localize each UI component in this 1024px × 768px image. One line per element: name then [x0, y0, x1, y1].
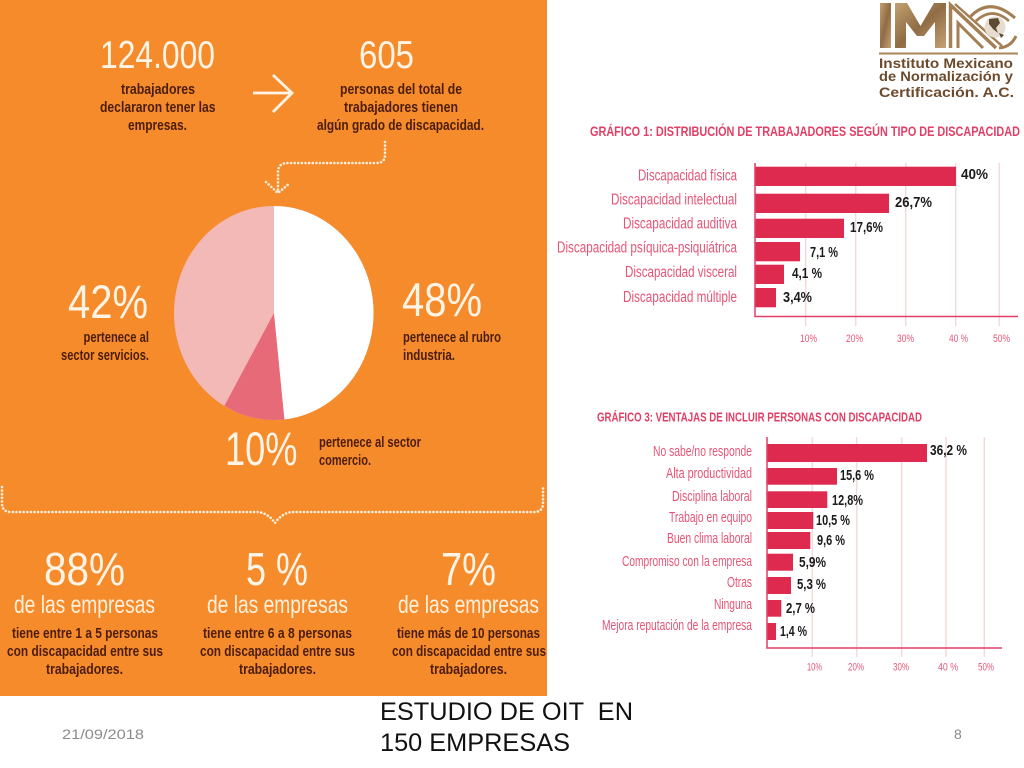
value labels: 7,1 % [810, 244, 838, 261]
category labels: Trabajo en equipo [669, 510, 752, 526]
axis ticks: 20% [846, 333, 863, 345]
stat: 48% industry: 48% [402, 273, 482, 326]
stat: 42% services [61, 275, 149, 364]
stat: 7% of companies: 7% [441, 543, 496, 595]
arrow: right [253, 75, 292, 112]
stat: 605 people: 605 [359, 34, 414, 77]
logo: IMNC: de Normalización y [879, 69, 1014, 84]
stat: 88% of companies [7, 543, 163, 678]
value labels: 4,1 % [792, 265, 822, 282]
stat: 10% commerce: pertenece al sector [319, 435, 421, 451]
category labels: No sabe/no responde [653, 444, 752, 460]
footer: date: 21/09/2018 [62, 726, 144, 742]
value labels: 3,4% [783, 289, 812, 306]
stat: 124.000 workers [100, 34, 216, 134]
bars [767, 444, 927, 640]
bracket: dotted divider [2, 487, 543, 523]
stat: 7% of companies: trabajadores. [430, 662, 507, 678]
stat: 10% commerce [225, 422, 421, 475]
stat: 42% services: sector servicios. [61, 348, 149, 364]
chart: gráfico 3 [597, 410, 1002, 674]
value labels: 5,9% [799, 554, 826, 571]
category labels: Discapacidad múltiple [623, 289, 737, 306]
category labels [557, 168, 737, 306]
stat: 5% of companies: trabajadores. [239, 662, 316, 678]
stat: 7% of companies [392, 543, 546, 678]
footer: study caption [380, 698, 633, 757]
stat: 605 people: trabajadores tienen [344, 100, 458, 116]
stat: 605 people: algún grado de discapacidad. [317, 118, 484, 134]
axis ticks [800, 333, 1010, 345]
stat: 124.000 workers: 124.000 [100, 34, 215, 77]
logo: IMNC [879, 3, 1018, 100]
axis ticks: 50% [993, 333, 1010, 345]
axis ticks: 50% [978, 662, 994, 674]
category labels: Disciplina laboral [672, 489, 752, 505]
value labels: 15,6 % [840, 467, 874, 484]
stat: 88% of companies: 88% [44, 543, 125, 595]
value labels: 2,7 % [786, 600, 815, 617]
stat: 5% of companies: tiene entre 6 a 8 personas [203, 626, 352, 642]
value labels [783, 166, 988, 306]
category labels: Alta productividad [666, 466, 752, 482]
stat: 124.000 workers: declararon tener las [100, 100, 216, 116]
stat: 88% of companies: de las empresas [14, 591, 155, 619]
pie chart: sectors [174, 206, 374, 420]
category labels: Discapacidad intelectual [611, 192, 737, 208]
bars [755, 167, 956, 307]
chart: gráfico 1 [557, 122, 1020, 345]
stat: 605 people [317, 34, 484, 134]
value labels: 5,3 % [797, 576, 826, 593]
value labels [780, 442, 967, 640]
category labels: Mejora reputación de la empresa [602, 618, 753, 634]
stat: 10% commerce: 10% [225, 422, 298, 475]
category labels: Discapacidad física [638, 168, 737, 184]
category labels: Otras [727, 575, 752, 591]
chart title: GRÁFICO 3: VENTAJAS DE INCLUIR PERSONAS CON DISCAPACIDAD [597, 410, 922, 424]
stat: 88% of companies: trabajadores. [46, 662, 123, 678]
axis ticks [807, 662, 994, 674]
value labels: 26,7% [895, 194, 932, 211]
stat: 5% of companies: con discapacidad entre sus [200, 644, 355, 660]
arrow: dotted connector to pie [266, 142, 385, 193]
category labels: Discapacidad visceral [625, 264, 737, 281]
value labels: 10,5 % [816, 512, 850, 529]
value labels: 12,8% [832, 492, 863, 509]
stat: 7% of companies: de las empresas [398, 591, 539, 619]
logo: IMNC: Certificación. A.C. [879, 85, 1014, 100]
stat: 5% of companies: de las empresas [207, 591, 348, 619]
footer: study caption: ESTUDIO DE OIT EN [380, 698, 633, 726]
axis ticks: 30% [893, 662, 909, 674]
value labels: 36,2 % [930, 442, 967, 459]
stat: 48% industry: pertenece al rubro [403, 330, 501, 346]
axis ticks: 40 % [938, 662, 958, 674]
stat: 48% industry [402, 273, 501, 364]
value labels: 40% [961, 166, 988, 183]
category labels: Buen clima laboral [667, 531, 752, 547]
axis ticks: 10% [800, 333, 817, 345]
stat: 605 people: personas del total de [340, 82, 462, 98]
logo: IMNC: Instituto Mexicano [879, 56, 1013, 71]
axis ticks: 30% [897, 333, 914, 345]
stat: 42% services: 42% [68, 275, 148, 328]
category labels: Discapacidad auditiva [623, 216, 737, 232]
stat: 5% of companies: 5 % [246, 543, 308, 595]
footer: page number: 8 [954, 726, 962, 742]
category labels: Compromiso con la empresa [622, 554, 753, 570]
stat: 88% of companies: tiene entre 1 a 5 personas [12, 626, 158, 642]
value labels: 9,6 % [817, 532, 845, 549]
stat: 10% commerce: comercio. [319, 453, 371, 469]
axes [767, 437, 1002, 648]
category labels [602, 444, 753, 634]
value labels: 17,6% [850, 219, 883, 236]
stat: 124.000 workers: trabajadores [121, 82, 195, 98]
panel: orange infographic [0, 0, 547, 696]
value labels: 1,4 % [780, 623, 807, 640]
footer: study caption: 150 EMPRESAS [380, 729, 570, 757]
axis ticks: 40 % [949, 333, 968, 345]
axes [755, 163, 1018, 316]
stat: 7% of companies: con discapacidad entre sus [392, 644, 546, 660]
axis ticks: 10% [807, 662, 822, 674]
stat: 7% of companies: tiene más de 10 personas [397, 626, 540, 642]
axis ticks: 20% [848, 662, 864, 674]
stat: 42% services: pertenece al [84, 330, 149, 346]
stat: 124.000 workers: empresas. [128, 118, 187, 134]
category labels: Discapacidad psíquica-psiquiátrica [557, 240, 737, 256]
category labels: Ninguna [714, 597, 753, 613]
stat: 48% industry: industria. [403, 348, 455, 364]
stat: 5% of companies [200, 543, 355, 678]
stat: 88% of companies: con discapacidad entre sus [7, 644, 163, 660]
